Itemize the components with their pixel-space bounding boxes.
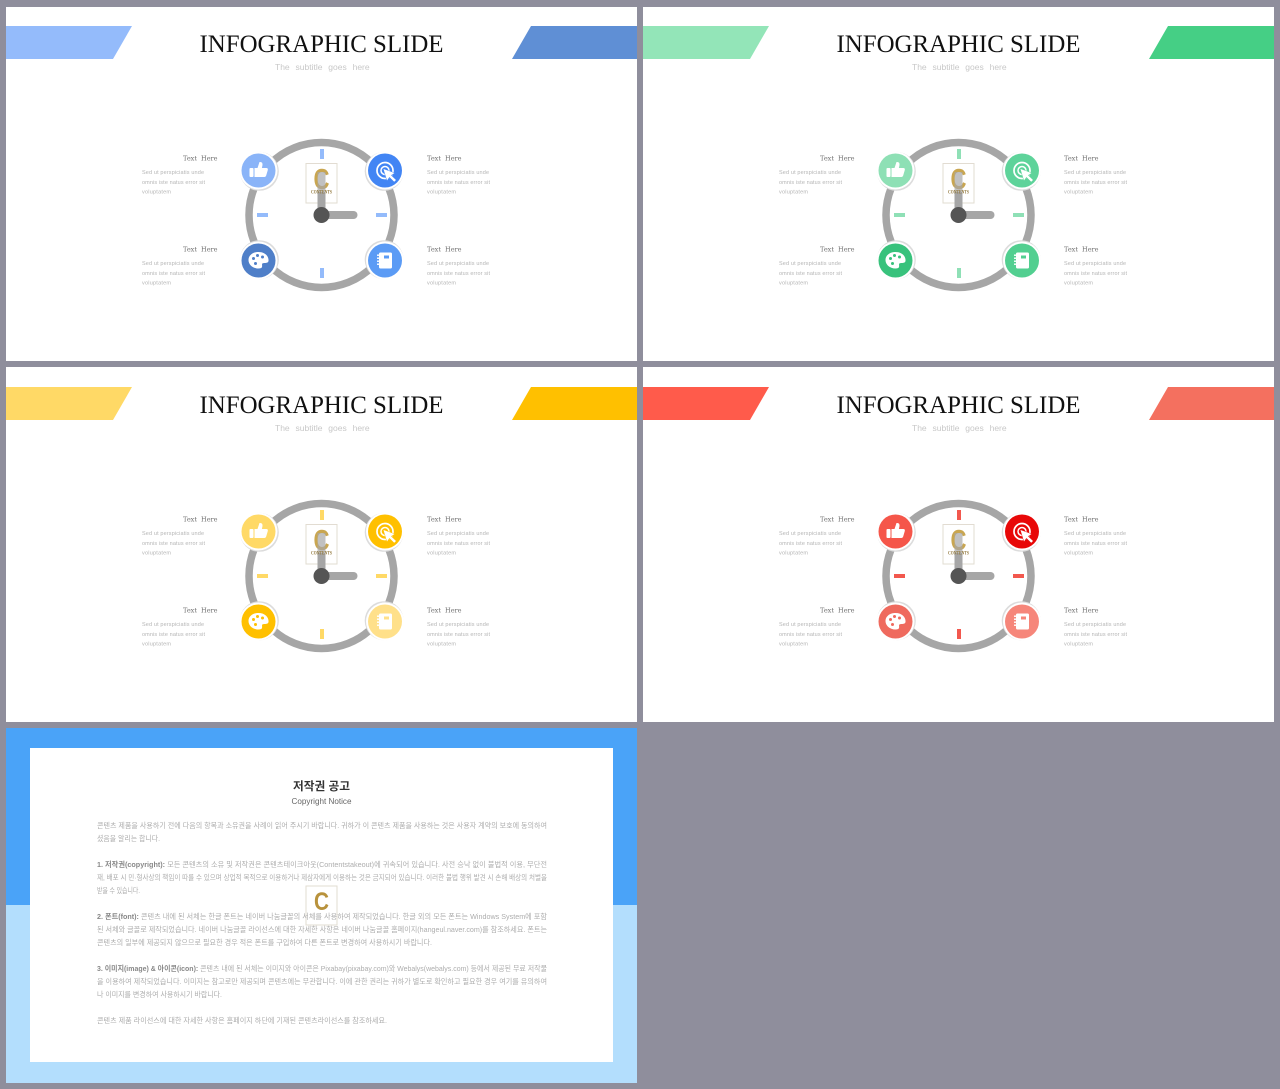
tick marks <box>257 149 387 278</box>
icon: target cursor <box>365 152 404 191</box>
text block: top left <box>142 154 218 196</box>
text block: bottom right: Sed ut perspiciatis unde <box>1064 261 1126 267</box>
subtitle: The subtitle goes here <box>275 62 370 72</box>
text block: top left: voluptatem <box>779 190 808 196</box>
clock hands <box>314 533 358 584</box>
text block: top left: Text Here <box>820 154 855 162</box>
text block: bottom right <box>427 606 490 648</box>
text block: bottom right: omnis iste natus error sit <box>427 271 490 277</box>
text block: bottom right: Text Here <box>1064 606 1099 614</box>
logo: C <box>314 888 329 916</box>
text block: bottom left <box>142 606 218 648</box>
logo: C <box>950 164 967 196</box>
text block: bottom left: Sed ut perspiciatis unde <box>142 261 204 267</box>
paragraph: license: 콘텐츠 제품 라이선스에 대한 자세한 사항은 홈페이지 하단에 기재된 콘텐츠라이선스를 참조하세요. <box>97 1015 387 1025</box>
icon: palette <box>240 601 279 640</box>
subheading: Copyright Notice <box>292 796 352 806</box>
paragraph: image and icon: 나 이미지를 변경하여 사용하시기 바랍니다. <box>97 989 222 999</box>
text block: bottom left: Text Here <box>820 606 855 614</box>
slide background <box>6 7 637 361</box>
text block: top right: Text Here <box>1064 154 1099 162</box>
text block: top right <box>427 154 490 196</box>
paragraph: font: 2. 폰트(font): 콘텐츠 내에 된 서체는 한글 폰트는 네이버 나눔글꼴의 서체를 사용하여 제작되었습니다. 한글 외의 모든 폰트는 Windows System에 포함 <box>97 911 547 921</box>
text block: top right: Sed ut perspiciatis unde <box>427 531 489 537</box>
clock ring <box>886 142 1031 288</box>
text block: bottom right: Sed ut perspiciatis unde <box>427 261 489 267</box>
text block: bottom left: omnis iste natus error sit <box>779 632 842 638</box>
slide background <box>643 7 1274 361</box>
text block: top right: voluptatem <box>427 190 456 196</box>
text block: top left <box>779 516 855 556</box>
slide background <box>643 367 1274 722</box>
slide: red <box>643 367 1274 722</box>
clock ring <box>886 504 1031 648</box>
text block: top right: Sed ut perspiciatis unde <box>427 170 489 176</box>
text block: top left: Sed ut perspiciatis unde <box>142 170 204 176</box>
icon: thumbs up <box>240 152 279 191</box>
text block: bottom left: omnis iste natus error sit <box>142 632 205 638</box>
slide: blue <box>6 7 637 361</box>
icon: palette <box>240 240 279 280</box>
left accent bar <box>643 387 769 420</box>
right accent bar <box>512 26 637 59</box>
intro paragraph: 콘텐츠 제품을 사용하기 전에 다음의 항목과 소유권을 사례이 읽어 주시기 바랍니다. 귀하가 이 콘텐츠 제품을 사용하는 것은 사용자 계약의 보호에 동의하여 <box>97 820 547 830</box>
paragraph: image and icon: 을 이용하여 제작되었습니다. 이미지는 참고로만 제공되며 콘텐츠에는 무관합니다. 이에 관한 권리는 귀하가 별도로 확인하고 필요한 경우 여기를 유의하여 <box>97 976 547 986</box>
tick marks <box>894 510 1024 639</box>
clock <box>240 142 404 288</box>
clock hands <box>950 533 994 584</box>
text block: top left: Sed ut perspiciatis unde <box>142 531 204 537</box>
text block: bottom left: Sed ut perspiciatis unde <box>779 261 841 267</box>
text block: bottom left: omnis iste natus error sit <box>142 271 205 277</box>
intro paragraph: 셨음을 알리는 합니다. <box>97 834 160 843</box>
icon: thumbs up <box>876 512 916 552</box>
text block: bottom right: omnis iste natus error sit <box>427 632 490 638</box>
text block: top left: voluptatem <box>142 190 171 196</box>
clock hands <box>950 172 994 223</box>
text block: top right <box>1064 154 1127 196</box>
subtitle: The subtitle goes here <box>912 423 1007 433</box>
paragraph: font: 콘텐츠의 일부에 제공되지 않으므로 필요한 경우 적은 폰트를 구입하여 다른 폰트로 변경하여 사용하시기 바랍니다. <box>97 937 432 947</box>
slide: yellow <box>6 367 637 722</box>
text block: bottom left <box>779 246 855 286</box>
paragraph: font: 된 서체와 글꼴로 제작되었습니다. 네이버 나눔글꼴 라이선스에 대한 자세한 사항은 네이버 나눔글꼴 홈페이지(hangeul.naver.com)를 참조하세요. 폰트는 <box>97 924 547 934</box>
text block: top left: Sed ut perspiciatis unde <box>779 170 841 176</box>
text block: top right: omnis iste natus error sit <box>427 541 490 547</box>
text block: bottom right <box>427 246 490 286</box>
icon: notebook <box>1002 601 1041 640</box>
text block: bottom right: Sed ut perspiciatis unde <box>427 622 489 628</box>
tick marks <box>894 149 1024 278</box>
clock ring <box>249 142 394 288</box>
logo: C <box>950 525 967 557</box>
paragraph: copyright: 1. 저작권(copyright): 모든 콘텐츠의 소유 및 저작권은 콘텐츠테이크아웃(Contentstakeout)에 귀속되어 있습니다. 사전 승낙 없이 불법적 이용, 무단전 <box>97 859 547 869</box>
text block: top left: Text Here <box>820 516 855 524</box>
text block: bottom right <box>1064 246 1127 286</box>
intro paragraph <box>97 820 547 843</box>
tick marks <box>257 510 387 639</box>
clock hands <box>314 172 358 223</box>
text block: bottom left: Text Here <box>183 606 218 614</box>
text block: bottom right: Sed ut perspiciatis unde <box>1064 622 1126 628</box>
paragraph: copyright: 받을 수 있습니다. <box>97 885 140 895</box>
logo: C <box>314 164 330 196</box>
text block: bottom left: voluptatem <box>142 280 171 286</box>
logo <box>306 524 337 564</box>
title: INFOGRAPHIC SLIDE <box>836 29 1080 58</box>
text block: bottom right: Text Here <box>1064 246 1099 254</box>
text block: bottom left <box>142 246 218 286</box>
logo <box>306 164 337 203</box>
text block: bottom left: Sed ut perspiciatis unde <box>142 622 204 628</box>
title: INFOGRAPHIC SLIDE <box>836 390 1080 419</box>
right accent bar <box>1149 26 1274 59</box>
text block: top left <box>142 516 218 556</box>
icon: target cursor <box>1002 512 1041 552</box>
icon: thumbs up <box>240 512 279 552</box>
text block: top right: Text Here <box>427 516 462 524</box>
panel: copyright notice <box>6 728 637 1083</box>
icon: target cursor <box>365 512 404 552</box>
clock <box>240 504 404 648</box>
text block: bottom right: Text Here <box>427 246 462 254</box>
paragraph: copyright <box>97 859 547 895</box>
text block: top right <box>427 516 490 556</box>
text block: top left: Text Here <box>183 516 218 524</box>
text block: bottom left: voluptatem <box>779 642 808 648</box>
clock ring <box>249 504 394 648</box>
text block: top left: omnis iste natus error sit <box>142 180 205 186</box>
white card <box>30 748 613 1062</box>
text block: top left <box>779 154 855 196</box>
slide: green <box>643 7 1274 361</box>
paragraph: copyright: 재, 배포 시 민·형사상의 책임이 따를 수 있으며 상업적 목적으로 이용하거나 제삼자에게 이용하는 것은 금지되어 있습니다. 이러한 불법 행위 발견 시 손해 배상의 처벌을 <box>97 872 547 882</box>
text block: bottom right: voluptatem <box>1064 642 1093 648</box>
icon: notebook <box>365 240 404 280</box>
text block: bottom right: omnis iste natus error sit <box>1064 271 1127 277</box>
text block: top right: Text Here <box>1064 516 1099 524</box>
paragraph: image and icon <box>97 963 547 999</box>
icon: palette <box>876 601 916 640</box>
logo wordmark: CONTENTS <box>948 552 969 556</box>
text block: top right: voluptatem <box>427 550 456 556</box>
text block: bottom right <box>1064 606 1127 648</box>
clock <box>876 504 1041 648</box>
text block: top left: voluptatem <box>779 550 808 556</box>
text block: bottom right: voluptatem <box>1064 280 1093 286</box>
text block: top right: voluptatem <box>1064 550 1093 556</box>
text block: top left: omnis iste natus error sit <box>779 180 842 186</box>
icon: thumbs up <box>876 152 916 191</box>
text block: bottom left: voluptatem <box>142 642 171 648</box>
slide background <box>6 367 637 722</box>
paragraph: image and icon: 3. 이미지(image) & 아이콘(icon): 콘텐츠 내에 된 서체는 이미지와 아이콘은 Pixabay(pixabay.com)와 Webalys(webalys.com) 등에서 제공된 무료 저작물 <box>97 963 547 973</box>
text block: bottom right: voluptatem <box>427 642 456 648</box>
text block: bottom left: Text Here <box>183 246 218 254</box>
icon: notebook <box>365 601 404 640</box>
logo <box>943 164 974 203</box>
paragraph: font <box>97 911 547 947</box>
background lower band <box>6 905 637 1083</box>
logo: C <box>314 525 330 557</box>
text block: top right: voluptatem <box>1064 190 1093 196</box>
text block: top left: omnis iste natus error sit <box>142 541 205 547</box>
text block: bottom left: Sed ut perspiciatis unde <box>779 622 841 628</box>
text block: bottom right: voluptatem <box>427 280 456 286</box>
right accent bar <box>1149 387 1274 420</box>
text block: bottom left <box>779 606 855 648</box>
icon: palette <box>876 240 916 280</box>
left accent bar <box>6 26 132 59</box>
text block: top right: Sed ut perspiciatis unde <box>1064 531 1126 537</box>
subtitle: The subtitle goes here <box>912 62 1007 72</box>
text block: top left: Text Here <box>183 154 218 162</box>
icon: notebook <box>1002 240 1041 280</box>
text block: top left: voluptatem <box>142 550 171 556</box>
text block: top right: omnis iste natus error sit <box>1064 180 1127 186</box>
clock <box>876 142 1041 288</box>
heading: 저작권 공고 <box>293 779 350 793</box>
text block: bottom right: Text Here <box>427 606 462 614</box>
text block: bottom left: omnis iste natus error sit <box>779 271 842 277</box>
logo <box>943 524 974 564</box>
text block: bottom left: voluptatem <box>779 280 808 286</box>
icon: target cursor <box>1002 152 1041 191</box>
logo wordmark: CONTENTS <box>948 190 969 196</box>
left accent bar <box>643 26 769 59</box>
background upper band <box>6 728 637 905</box>
logo <box>306 886 337 925</box>
text block: top left: omnis iste natus error sit <box>779 541 842 547</box>
left accent bar <box>6 387 132 420</box>
text block: top right: Sed ut perspiciatis unde <box>1064 170 1126 176</box>
logo wordmark: CONTENTS <box>311 190 332 196</box>
title: INFOGRAPHIC SLIDE <box>200 390 444 419</box>
right accent bar <box>512 387 637 420</box>
text block: top right <box>1064 516 1127 556</box>
text block: top right: omnis iste natus error sit <box>1064 541 1127 547</box>
text block: top right: Text Here <box>427 154 462 162</box>
logo wordmark: CONTENTS <box>311 552 332 556</box>
title: INFOGRAPHIC SLIDE <box>200 29 444 58</box>
text block: top left: Sed ut perspiciatis unde <box>779 531 841 537</box>
text block: bottom right: omnis iste natus error sit <box>1064 632 1127 638</box>
text block: bottom left: Text Here <box>820 246 855 254</box>
text block: top right: omnis iste natus error sit <box>427 180 490 186</box>
subtitle: The subtitle goes here <box>275 423 370 433</box>
